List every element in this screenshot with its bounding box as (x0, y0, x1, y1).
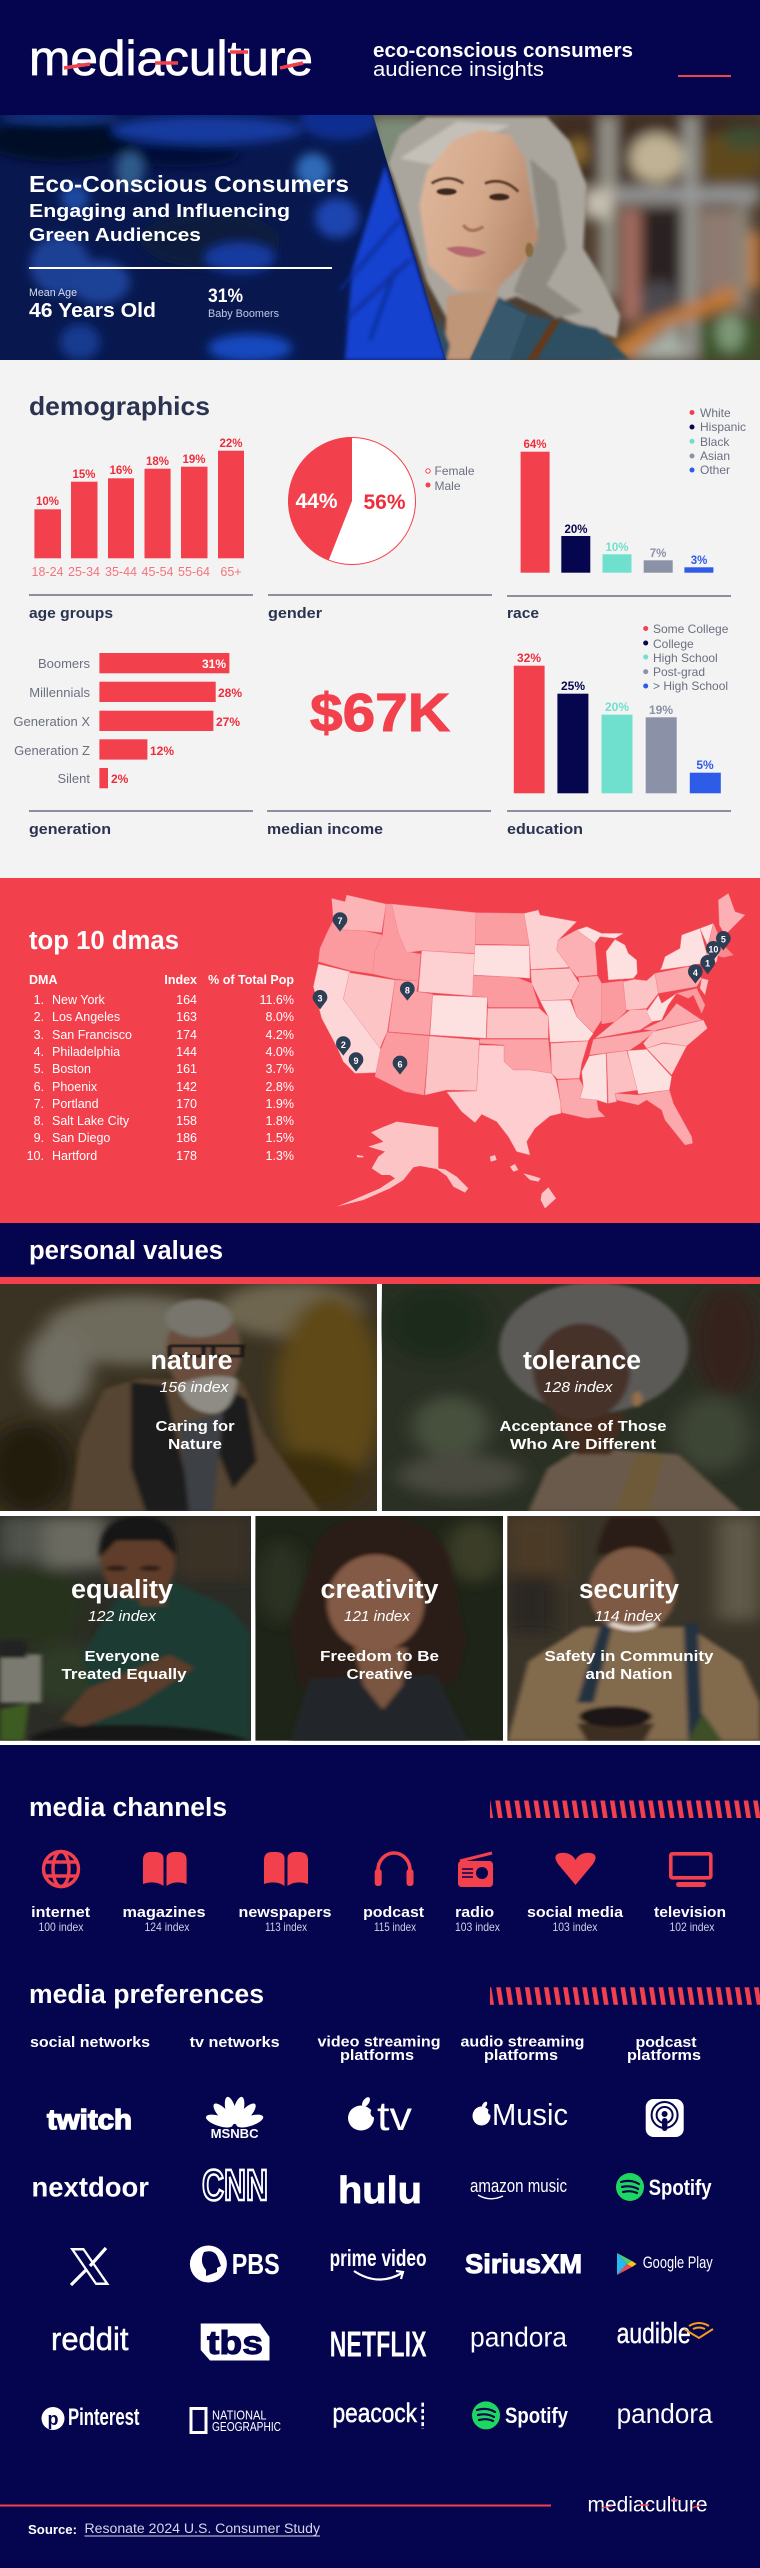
text: tolerance: Who Are Different (510, 1437, 656, 1453)
legend: race: Black (700, 435, 730, 449)
logo: national geographic: NATIONAL (212, 2408, 267, 2422)
icon: internet globe (44, 1852, 78, 1886)
panel: tolerance (382, 1282, 760, 1511)
text: tolerance (500, 1347, 666, 1453)
labels: media channels (31, 1904, 726, 1934)
map: united states: 10 (708, 945, 718, 955)
text: tolerance: tolerance (523, 1347, 641, 1375)
logo: pandora: pandora (470, 2322, 567, 2352)
bar chart: race: 10% (605, 542, 629, 554)
table: top dmas: 6. (34, 1080, 44, 1094)
column headers: tv networks (190, 2035, 280, 2051)
logo: pbs: PBS (232, 2249, 280, 2281)
icon: social media heart (555, 1853, 596, 1885)
bar chart: education: 25% (561, 679, 585, 693)
logo: spotify: Spotify (505, 2403, 569, 2428)
table: top dmas: 8. (34, 1114, 44, 1128)
logo: pbs (190, 2246, 280, 2282)
labels: media channels: internet (31, 1904, 90, 1921)
logo: google play (617, 2253, 713, 2275)
bar chart: generation: 27% (216, 715, 240, 729)
label: education: education (507, 821, 583, 838)
text: tolerance: Acceptance of Those (500, 1419, 666, 1435)
pie chart: gender: 56% (363, 491, 406, 514)
photo: woman with long hair (255, 1516, 504, 1741)
map: united states: 9 (353, 1056, 358, 1066)
panel: security (507, 1516, 760, 1741)
stat: median income: $67K (310, 683, 450, 743)
logo: apple music: Music (492, 2097, 568, 2132)
text: creativity: Freedom to Be (320, 1649, 439, 1665)
logo: twitch: twitch (47, 2104, 132, 2135)
header title: eco-conscious consumers (373, 39, 633, 62)
text: nature: Caring for (156, 1419, 235, 1435)
icon: television (671, 1854, 711, 1887)
map: united states: 1 (705, 959, 710, 969)
table: top dmas: 1.9% (266, 1097, 294, 1111)
logo: pinterest: Pinterest (68, 2404, 140, 2431)
bar chart: education: 32% (517, 651, 541, 665)
label: median income: median income (267, 821, 383, 838)
column headers: video streaming (318, 2034, 440, 2050)
header title (373, 39, 633, 81)
table: top dmas: Index (164, 973, 197, 987)
bar chart: age groups: 22% (219, 438, 243, 450)
text: tolerance: 128 index (544, 1379, 613, 1396)
column headers: platforms (484, 2048, 558, 2064)
labels: media channels: 113 index (265, 1920, 307, 1934)
labels: media channels: 102 index (670, 1920, 714, 1934)
legend: gender: Female (434, 464, 475, 478)
hero text: 46 Years Old (29, 300, 156, 322)
panel: nature (0, 1282, 383, 1513)
hero text: Green Audiences (29, 224, 201, 245)
bar chart: education: 20% (605, 700, 629, 714)
icon: podcast headphones (375, 1853, 414, 1886)
table: top dmas: % of Total Pop (208, 973, 294, 987)
text: creativity: creativity (320, 1576, 439, 1604)
logo: prime video (330, 2245, 427, 2280)
table: top dmas: Boston (52, 1062, 91, 1076)
labels: media channels: podcast (363, 1904, 424, 1921)
logo: tbs: tbs (207, 2324, 263, 2361)
heading: media channels: media channels (29, 1794, 227, 1822)
legend: education: College (653, 637, 694, 651)
labels: media channels: 100 index (38, 1920, 84, 1934)
table: top dmas: Salt Lake City (52, 1114, 130, 1128)
bar chart: race: 20% (564, 524, 588, 536)
logo: hulu: hulu (338, 2170, 422, 2212)
text: creativity (320, 1576, 439, 1683)
logo: mediaculture: mediaculture (29, 32, 313, 86)
map: united states: 2 (341, 1040, 346, 1050)
icon: radio (458, 1853, 493, 1887)
bar chart: education (514, 622, 729, 793)
table: top dmas: 10. (27, 1149, 44, 1163)
table: top dmas: DMA (29, 973, 57, 987)
logo: nextdoor: nextdoor (32, 2172, 149, 2202)
heading: demographics: demographics (29, 391, 210, 421)
panel: creativity (255, 1516, 504, 1741)
hero text: Eco-Conscious Consumers (29, 171, 349, 197)
table: top dmas: Phoenix (52, 1080, 98, 1094)
table: top dmas: 1.3% (266, 1149, 294, 1163)
map: united states (313, 893, 745, 1208)
map: united states: 5 (721, 935, 726, 945)
legend: race: Other (700, 463, 730, 477)
logo: spotify (616, 2173, 712, 2201)
bar chart: age groups: 16% (109, 465, 133, 477)
logo: national geographic: GEOGRAPHIC (212, 2419, 281, 2434)
bar chart: age groups: 25-34 (68, 565, 100, 579)
text: equality: Treated Equally (62, 1667, 186, 1683)
logo: pandora: pandora (617, 2398, 713, 2429)
text: nature: 156 index (160, 1379, 229, 1396)
table: top dmas: 9. (34, 1131, 44, 1145)
heading band: personal values: personal values (29, 1237, 223, 1265)
labels: media channels: magazines (122, 1904, 206, 1921)
labels: media channels: 124 index (144, 1920, 190, 1934)
bar chart: education: 19% (649, 703, 673, 717)
table: top dmas: 11.6% (259, 993, 294, 1007)
logo: apple podcasts (646, 2099, 684, 2137)
table: top dmas: 4.2% (266, 1028, 294, 1042)
table: top dmas: 170 (176, 1097, 197, 1111)
text: security: Safety in Community (544, 1649, 714, 1665)
icon: magazine book (143, 1852, 187, 1886)
legend: gender: Male (434, 479, 461, 493)
pie chart: gender (288, 437, 475, 564)
table: top dmas: 161 (176, 1062, 197, 1076)
bar chart: age groups: 65+ (220, 565, 242, 579)
panel: media preferences (29, 1981, 760, 2434)
hero panel (0, 100, 760, 362)
column headers: podcast (636, 2035, 697, 2051)
bar chart: generation: Silent (57, 771, 90, 786)
bar chart: age groups: 10% (36, 496, 59, 508)
photo: man with beard (0, 1282, 383, 1513)
map pins (313, 912, 731, 1075)
bar chart: generation: 28% (218, 686, 242, 700)
photo: woman with curly hair (382, 1282, 760, 1511)
logo: spotify: Spotify (649, 2175, 712, 2200)
hero text: Baby Boomers (208, 308, 279, 320)
column headers: audio streaming (460, 2034, 584, 2050)
text: security (544, 1576, 714, 1683)
legend: education: > High School (653, 679, 728, 693)
hero photo: woman with grey hair (370, 115, 760, 360)
text: equality (62, 1576, 186, 1683)
logo: google play: Google Play (643, 2253, 713, 2272)
table: top dmas: 174 (176, 1028, 197, 1042)
heading band: personal values (0, 1223, 760, 1284)
logo: peacock: peacock (332, 2398, 417, 2428)
legend: race (690, 406, 746, 477)
labels: media channels: radio (455, 1904, 494, 1921)
column headers: platforms (340, 2048, 414, 2064)
table: top dmas: 186 (176, 1131, 197, 1145)
logo: pinterest (42, 2404, 140, 2431)
table: top dmas: 4.0% (266, 1045, 294, 1059)
bar chart: generation: Millennials (29, 685, 90, 700)
logo: prime video: prime video (330, 2245, 427, 2271)
hero text: Engaging and Influencing (29, 200, 290, 221)
logo: national geographic (191, 2408, 281, 2434)
panel: top 10 dmas (0, 878, 760, 1223)
text: nature: Nature (168, 1437, 222, 1453)
bar chart: race: 64% (523, 439, 547, 451)
table: top dmas: 2. (34, 1010, 44, 1024)
text: security: 114 index (594, 1608, 662, 1625)
bar chart: race: 7% (650, 548, 666, 560)
bar chart: generation: Generation X (13, 714, 90, 729)
heading: media preferences: media preferences (29, 1981, 264, 2009)
table: top dmas: 142 (176, 1080, 197, 1094)
column headers: social networks (30, 2035, 150, 2051)
bar chart: age groups: 15% (72, 469, 96, 481)
legend: education: High School (653, 651, 718, 665)
table: top dmas: 8.0% (266, 1010, 294, 1024)
source line: Source: (28, 2522, 77, 2537)
table: top dmas (27, 973, 294, 1163)
map: united states: 3 (317, 994, 322, 1004)
bar chart: age groups: 18-24 (32, 565, 64, 579)
table: top dmas: 1.5% (266, 1131, 294, 1145)
labels: media channels: 103 index (552, 1920, 598, 1934)
logo: audible: audible (617, 2318, 691, 2350)
column headers: platforms (627, 2048, 701, 2064)
table: top dmas: 163 (176, 1010, 197, 1024)
label: age groups: age groups (29, 605, 113, 622)
panel: demographics (0, 360, 760, 878)
text: creativity: Creative (346, 1667, 412, 1683)
bar chart: generation (13, 653, 242, 788)
table: top dmas: 2.8% (266, 1080, 294, 1094)
bar chart: race: 3% (691, 555, 707, 567)
header title: audience insights (373, 58, 544, 81)
text: equality: equality (71, 1576, 174, 1604)
footer logo: mediaculture: mediaculture (588, 2494, 708, 2516)
text: security: and Nation (586, 1667, 672, 1683)
table: top dmas: Los Angeles (52, 1010, 120, 1024)
map: united states: 7 (337, 916, 342, 926)
text: creativity: 121 index (344, 1608, 410, 1625)
hero text: Mean Age (29, 287, 77, 299)
logo: pinterest: p (48, 2409, 58, 2429)
map: united states: 8 (405, 985, 410, 995)
legend: race: Hispanic (700, 420, 746, 434)
column headers (30, 2034, 701, 2064)
logo: amazon music: amazon music (470, 2176, 567, 2196)
white dividers between value photos (0, 1284, 760, 1745)
logo: cnn: CNN (202, 2161, 268, 2210)
legend: race: Asian (700, 449, 730, 463)
table: top dmas: 178 (176, 1149, 197, 1163)
bar chart: age groups: 18% (146, 456, 169, 468)
logo: msnbc (205, 2096, 265, 2141)
table: top dmas: Portland (52, 1097, 99, 1111)
text: equality: Everyone (84, 1649, 160, 1665)
labels: media channels: television (654, 1904, 726, 1921)
text: nature (152, 1352, 234, 1449)
table: top dmas: 144 (176, 1045, 197, 1059)
photo: man gardening (0, 1516, 251, 1741)
table: top dmas: 3. (34, 1028, 44, 1042)
legend: gender (426, 464, 475, 493)
logo: msnbc: MSNBC (211, 2126, 259, 2141)
table: top dmas: 7. (34, 1097, 44, 1111)
labels: media channels: newspapers (238, 1904, 332, 1921)
hero blue diagonal panel (0, 100, 460, 362)
logo: spotify (472, 2401, 569, 2429)
legend: race: White (700, 406, 731, 420)
table: top dmas: San Francisco (52, 1028, 132, 1042)
labels: media channels: social media (527, 1904, 624, 1921)
legend: education (643, 622, 729, 693)
logo: apple tv: tv (377, 2093, 413, 2139)
logo: reddit: reddit (51, 2321, 129, 2357)
heading: top 10 dmas: top 10 dmas (29, 927, 179, 955)
table: top dmas: 1.8% (266, 1114, 294, 1128)
bar chart: age groups (32, 438, 244, 579)
logo: x (70, 2248, 110, 2285)
icon: newspaper book (264, 1852, 308, 1886)
hero text (29, 171, 349, 322)
table: top dmas: 4. (34, 1045, 44, 1059)
labels: media channels: 115 index (374, 1920, 416, 1934)
table: top dmas: Philadelphia (52, 1045, 120, 1059)
text: security: security (579, 1576, 680, 1604)
photo: woman with plant (507, 1516, 760, 1741)
bar chart: generation: Boomers (38, 656, 90, 671)
bar chart: generation: 2% (111, 772, 129, 786)
text: nature: nature (150, 1347, 232, 1375)
bar chart: education: 5% (696, 758, 714, 772)
panel: media channels (29, 1794, 760, 1934)
table: top dmas: Hartford (52, 1149, 97, 1163)
legend: education: Post-grad (653, 665, 705, 679)
table: top dmas: 164 (176, 993, 197, 1007)
bar chart: age groups: 35-44 (105, 565, 137, 579)
panel: equality (0, 1516, 251, 1741)
source line: Resonate 2024 U.S. Consumer Study (84, 2521, 320, 2536)
table: top dmas: 1. (34, 993, 44, 1007)
logo: netflix: NETFLIX (330, 2324, 427, 2364)
footer (0, 2494, 708, 2537)
bar chart: generation: Generation Z (14, 743, 90, 758)
logo: apple tv (348, 2093, 413, 2139)
text: equality: 122 index (88, 1608, 157, 1625)
labels: media channels: 103 index (455, 1920, 500, 1934)
legend: education: Some College (653, 622, 729, 636)
table: top dmas: 158 (176, 1114, 197, 1128)
label: generation: generation (29, 821, 111, 838)
label: gender: gender (268, 605, 322, 622)
bar chart: age groups: 45-54 (142, 565, 174, 579)
table: top dmas: New York (52, 993, 106, 1007)
hero text: 31% (208, 285, 243, 307)
label: race: race (507, 605, 539, 622)
map: united states: 4 (693, 968, 698, 978)
bar chart: generation: 12% (150, 744, 174, 758)
logo: siriusxm: SiriusXM (465, 2249, 582, 2279)
header band (0, 0, 760, 115)
table: top dmas: 5. (34, 1062, 44, 1076)
table: top dmas: San Diego (52, 1131, 110, 1145)
pie chart: gender: 44% (295, 490, 338, 513)
map: united states: 6 (397, 1059, 402, 1069)
bar chart: age groups: 55-64 (178, 565, 210, 579)
bar chart: generation: 31% (202, 657, 226, 671)
bar chart: race (521, 406, 746, 573)
bar chart: age groups: 19% (182, 454, 206, 466)
table: top dmas: 3.7% (266, 1062, 294, 1076)
